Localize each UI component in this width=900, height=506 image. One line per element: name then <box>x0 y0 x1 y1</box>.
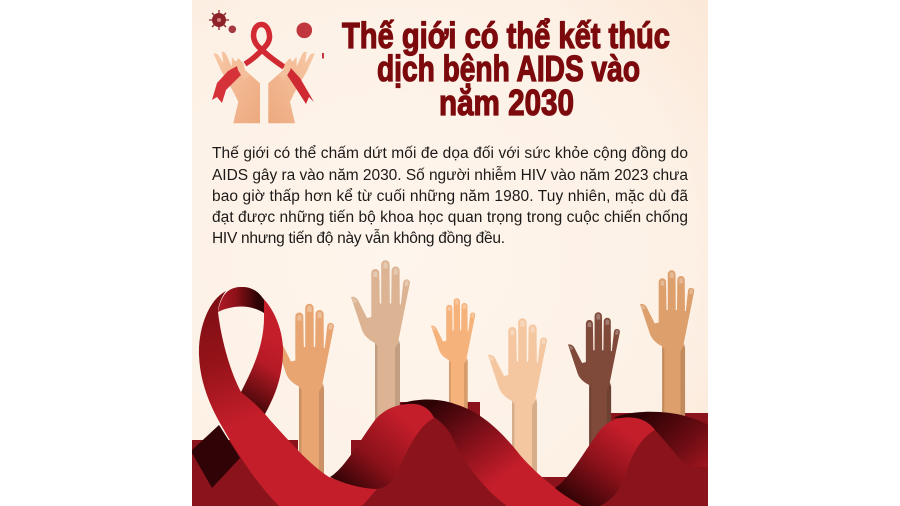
ribbon top arch <box>218 287 264 313</box>
title: dịch bệnh AIDS vào <box>377 48 640 89</box>
tick mark <box>322 53 324 58</box>
ribbon front strand <box>199 291 378 506</box>
body text: bao giờ thấp hơn kể từ cuối những năm 1980. Tuy nhiên, mặc dù đã <box>212 188 688 205</box>
ribbon second wave crest <box>555 417 655 506</box>
icon: small virus <box>228 26 236 33</box>
illustration: hands holding ribbon with viruses <box>209 10 324 123</box>
title <box>342 15 670 123</box>
dark red base band <box>192 402 708 506</box>
body text: HIV nhưng tiến độ này vẫn không đồng đều. <box>212 230 505 247</box>
body text <box>212 145 688 247</box>
hand 6 <box>640 270 694 426</box>
red ribbon <box>192 287 708 506</box>
hand 1 <box>275 304 334 474</box>
title: năm 2030 <box>439 82 574 123</box>
raised hands <box>275 260 694 488</box>
background panel <box>192 0 708 506</box>
body text: AIDS gây ra vào năm 2030. Số người nhiễm HIV vào năm 2023 chưa <box>212 167 688 184</box>
icon: large virus <box>209 10 229 30</box>
body text: Thế giới có thể chấm dứt mối đe dọa đối với sức khỏe cộng đồng do <box>212 145 688 162</box>
ribbon right side of loop <box>241 290 283 423</box>
icon: round virus <box>296 22 312 38</box>
hand 4 <box>488 318 547 488</box>
ribbon first wave crest <box>330 404 434 489</box>
hand 5 <box>568 312 620 462</box>
ribbon right dark fold <box>613 412 708 467</box>
body text: đạt được những tiến bộ khoa học quan trọng trong cuộc chiến chống <box>212 209 688 226</box>
right hand <box>268 52 315 123</box>
left hand <box>213 52 260 123</box>
red ribbon <box>212 24 314 104</box>
thumbs over ribbon <box>236 58 292 80</box>
ribbon descending wave <box>399 399 582 506</box>
hand 2 <box>351 260 410 430</box>
ribbon tail <box>192 425 240 488</box>
title: Thế giới có thể kết thúc <box>342 15 670 56</box>
hand 3 <box>431 298 475 426</box>
